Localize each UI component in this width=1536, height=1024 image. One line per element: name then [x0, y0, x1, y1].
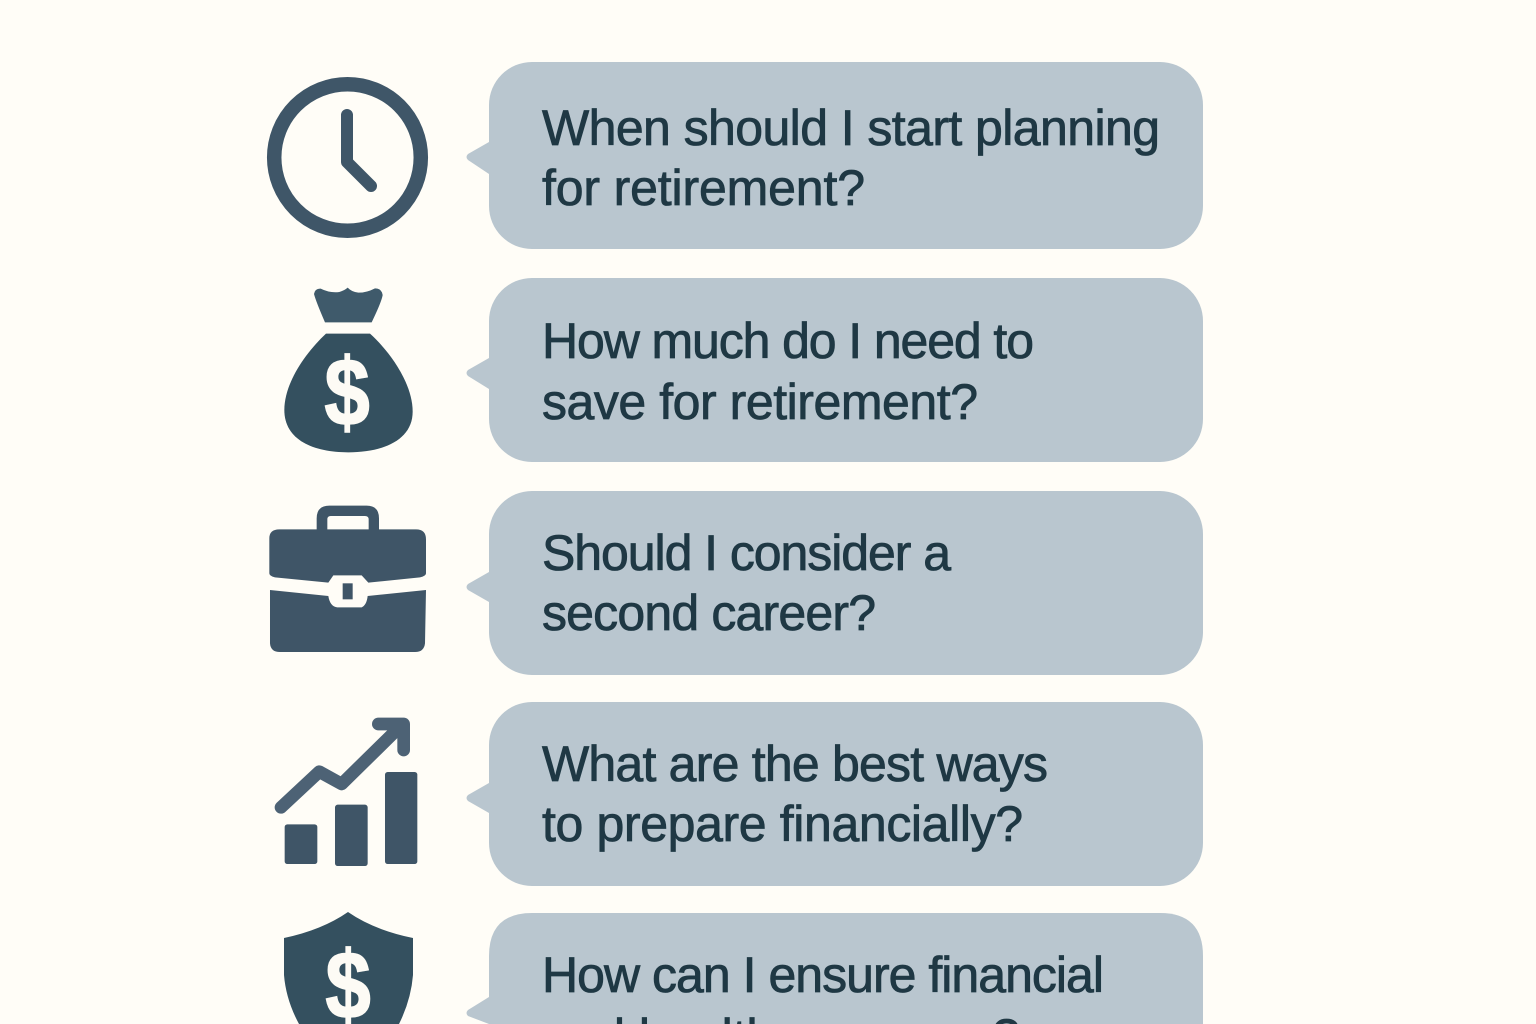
speech bubble 3: Should I consider a	[542, 525, 951, 581]
speech bubble 2: How much do I need to	[542, 313, 1034, 369]
row 2: how much to save	[284, 278, 1203, 462]
speech bubble 4	[466, 702, 1203, 886]
icon: briefcase	[269, 506, 426, 652]
row 5: financial security (cropped at page edge)	[284, 912, 1203, 1024]
icon: shield with dollar	[284, 912, 413, 1024]
speech bubble 1: When should I start planning	[542, 100, 1160, 156]
speech bubble 2	[466, 278, 1203, 462]
speech bubble 1: for retirement?	[542, 160, 865, 216]
row 4: preparing financially	[281, 702, 1203, 886]
speech bubble 3: second career?	[542, 585, 876, 641]
icon: money bag	[284, 288, 413, 452]
speech bubble 1	[466, 62, 1203, 249]
speech bubble 5: How can I ensure financial	[542, 947, 1104, 1003]
icon: growth chart	[281, 724, 417, 866]
speech bubble 3	[466, 491, 1203, 675]
icon: clock	[274, 84, 421, 231]
row 3: second career	[269, 491, 1203, 675]
row 1: when to start planning	[274, 62, 1203, 249]
speech bubble 4: to prepare financially?	[542, 796, 1023, 852]
speech bubble 5	[466, 913, 1203, 1024]
icon: money bag: $	[324, 338, 370, 445]
speech bubble 2: save for retirement?	[542, 374, 978, 430]
speech bubble 4: What are the best ways	[542, 736, 1048, 792]
